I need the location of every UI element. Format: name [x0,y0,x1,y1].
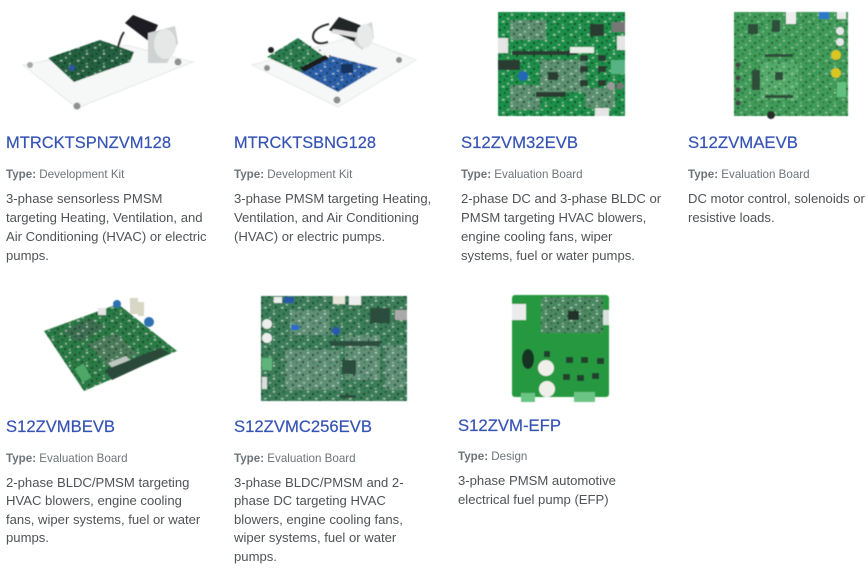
type: Type: Design [458,450,527,463]
description: targeting Heating, Ventilation, and [6,210,203,225]
description: wiper systems, fuel or water [233,530,397,545]
description: pumps. [6,248,49,263]
description: fans, wiper systems, fuel or water [6,512,201,527]
description [458,473,616,507]
image: angled evaluation board [44,298,177,391]
description: electrical fuel pump (EFP) [458,492,609,507]
title: S12ZVMC256EVB [234,417,372,436]
description: 2-phase BLDC/PMSM targeting [6,475,189,490]
description [688,191,865,225]
description: engine cooling fans, wiper [461,229,613,244]
title: S12ZVMAEVB [688,133,798,152]
description: 3-phase sensorless PMSM [6,191,162,206]
card: S12ZVMAEVB [688,12,865,225]
description [233,475,404,564]
type: Type: Development Kit [234,168,353,181]
image: evaluation board [734,12,848,119]
description: pumps. [6,530,49,545]
description [6,191,207,263]
description [461,191,662,263]
description: 3-phase PMSM targeting Heating, [234,191,431,206]
type: Type: Evaluation Board [688,168,810,181]
description: blowers, engine cooling fans, [234,512,403,527]
description: phase DC targeting HVAC [234,493,386,508]
description: HVAC blowers, engine cooling [6,493,182,508]
description: 3-phase PMSM automotive [458,473,616,488]
description: 3-phase BLDC/PMSM and 2- [234,475,404,490]
card: S12ZVM-EFP [458,295,616,507]
description: Ventilation, and Air Conditioning [234,210,419,225]
description: 2-phase DC and 3-phase BLDC or [461,191,662,206]
image: development kit with blue board [252,17,416,107]
title: S12ZVM32EVB [461,133,578,152]
card: MTRCKTSPNZVM128 [6,15,207,263]
description: DC motor control, solenoids or [688,191,865,206]
type: Type: Development Kit [6,168,125,181]
type: Type: Evaluation Board [6,452,128,465]
card: S12ZVMBEVB [6,298,201,545]
description: (HVAC) or electric pumps. [234,229,385,244]
title: S12ZVMBEVB [6,417,115,436]
description: pumps. [234,549,277,564]
description: Air Conditioning (HVAC) or electric [6,229,207,244]
title: MTRCKTSPNZVM128 [6,133,171,152]
type: Type: Evaluation Board [234,452,356,465]
description: PMSM targeting HVAC blowers, [461,210,646,225]
description: resistive loads. [688,210,775,225]
card: S12ZVMC256EVB [233,296,407,564]
type: Type: Evaluation Board [461,168,583,181]
card: S12ZVM32EVB [461,12,662,263]
description [234,191,431,244]
image: design board [512,295,609,402]
description [6,475,201,545]
image: evaluation board [498,12,625,116]
image: development kit with motor [23,15,193,110]
description: systems, fuel or water pumps. [461,248,635,263]
title: S12ZVM-EFP [458,416,561,435]
image: evaluation board [261,296,407,401]
title: MTRCKTSBNG128 [234,133,376,152]
card: MTRCKTSBNG128 [234,17,431,244]
